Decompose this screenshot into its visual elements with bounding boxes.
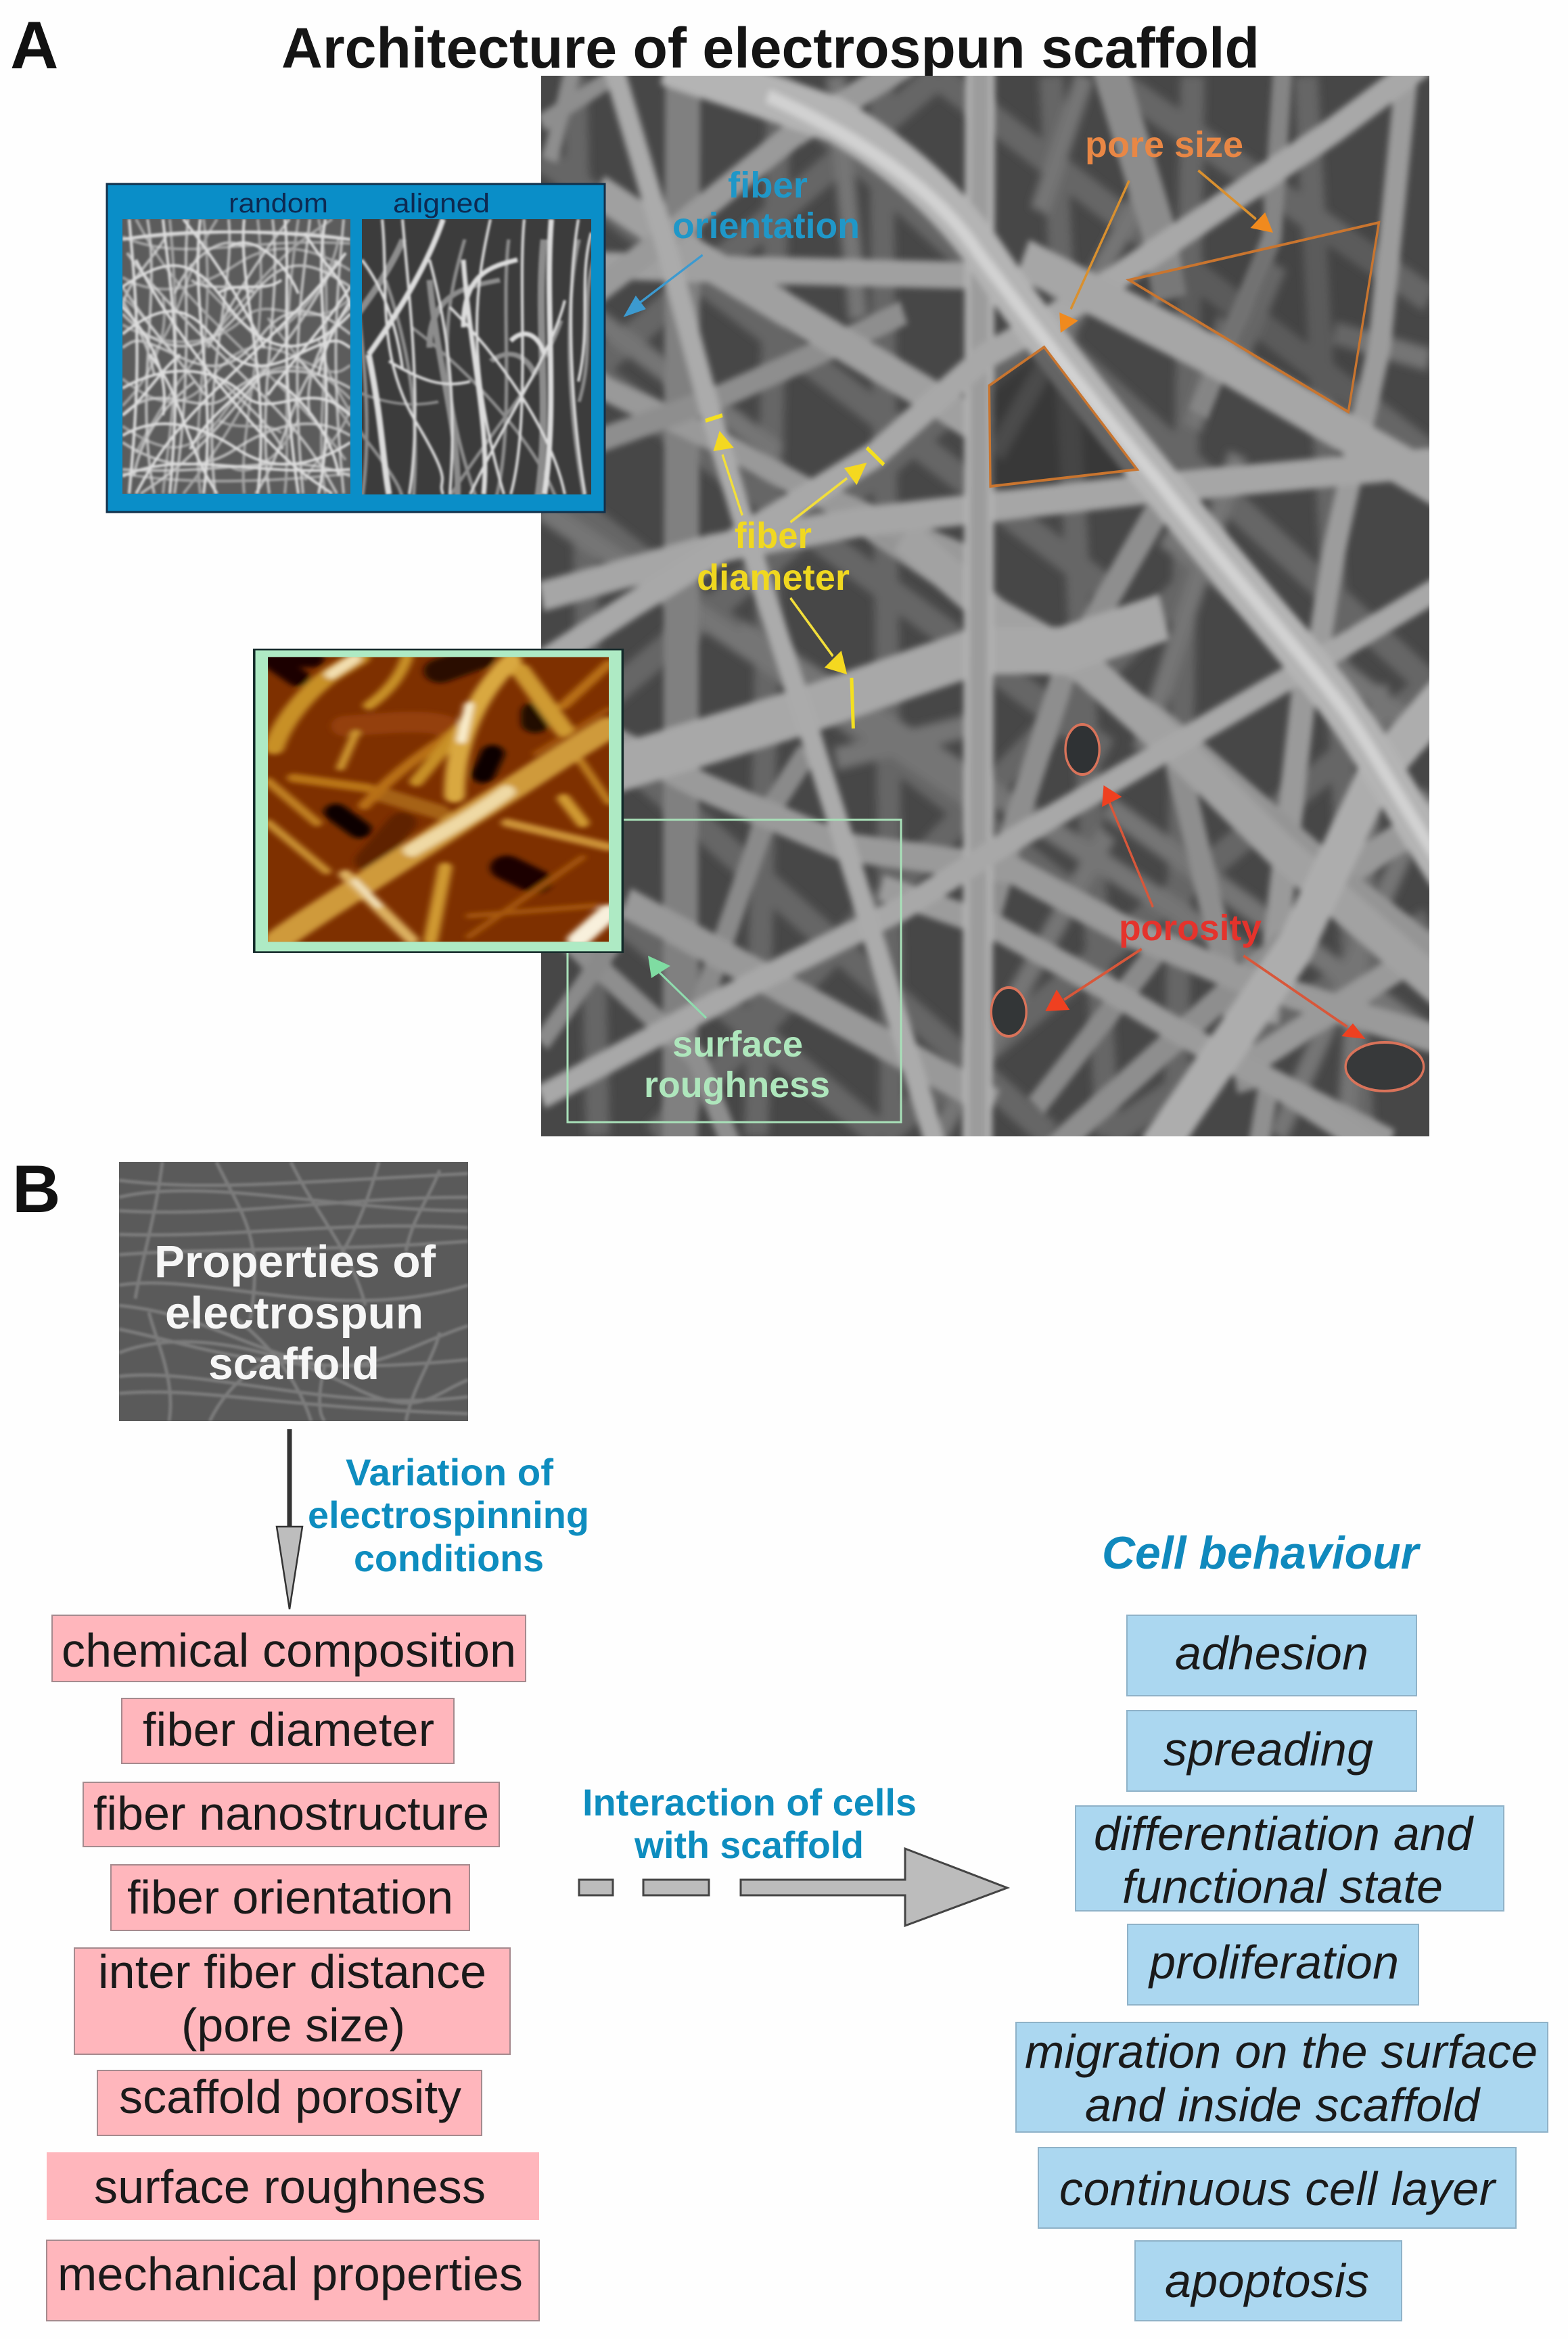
box: apoptosis	[1135, 2241, 1402, 2321]
inset panel: AFM image of surface roughness	[254, 649, 622, 952]
box: fiber orientation: fiber orientation	[127, 1871, 453, 1924]
label: variation of electrospinning conditions: electrospinning	[308, 1493, 589, 1536]
box: migration: and inside scaffold	[1085, 2079, 1481, 2131]
panel: properties of electrospun scaffold	[119, 1162, 468, 1421]
heading: cell behaviour: Cell behaviour	[1102, 1527, 1421, 1579]
annotation: pore size	[989, 124, 1379, 486]
label: variation of electrospinning conditions: Variation of	[346, 1451, 553, 1493]
box: inter fiber distance (pore size)	[74, 1945, 510, 2054]
box: scaffold porosity: scaffold porosity	[119, 2070, 461, 2123]
label: interaction of cells with scaffold	[582, 1781, 917, 1866]
box: mechanical properties	[47, 2240, 539, 2321]
annotation: fiber diameter: diameter	[697, 557, 850, 598]
label: variation of electrospinning conditions: conditions	[354, 1537, 544, 1579]
panel label A: A	[10, 7, 58, 83]
box: proliferation: proliferation	[1148, 1936, 1399, 1989]
annotation: porosity	[991, 724, 1424, 1091]
box: apoptosis: apoptosis	[1165, 2254, 1369, 2307]
scanning electron micrograph of fibers	[541, 62, 1448, 1151]
annotation: pore size: pore size	[1085, 124, 1243, 165]
annotation: fiber orientation: orientation	[672, 206, 860, 246]
box: continuous cell layer	[1038, 2148, 1516, 2228]
box: differentiation and functional state: differentiation and	[1094, 1807, 1474, 1860]
label: aligned: aligned	[393, 189, 490, 218]
annotation: surface roughness: roughness	[644, 1065, 830, 1105]
micrograph: aligned fibers	[362, 219, 591, 494]
box: fiber nanostructure: fiber nanostructure	[93, 1787, 489, 1840]
box: inter fiber distance (pore size): (pore size)	[181, 1999, 405, 2052]
box: fiber diameter: fiber diameter	[143, 1703, 434, 1756]
box: continuous cell layer: continuous cell layer	[1059, 2162, 1497, 2215]
panel label B: B	[12, 1151, 61, 1226]
text: properties: Properties of	[154, 1236, 436, 1287]
box: differentiation and functional state	[1076, 1806, 1504, 1913]
text: properties	[154, 1236, 436, 1389]
annotation: fiber orientation	[623, 165, 860, 317]
box: spreading: spreading	[1163, 1723, 1373, 1776]
box: inter fiber distance (pore size): inter fiber distance	[98, 1945, 486, 1998]
annotation: fiber orientation: fiber	[728, 165, 808, 206]
box: chemical composition: chemical composition	[62, 1624, 516, 1677]
micrograph: random fibers	[122, 219, 350, 494]
box: proliferation	[1128, 1924, 1419, 2005]
title: Architecture of electrospun scaffold	[281, 16, 1260, 80]
box: adhesion	[1127, 1615, 1416, 1696]
box: surface roughness	[47, 2152, 539, 2220]
box: mechanical properties: mechanical properties	[57, 2248, 523, 2300]
arrow: dashed interaction arrow	[579, 1849, 1007, 1926]
box: differentiation and functional state: functional state	[1122, 1860, 1443, 1913]
arrow: properties to parameters	[277, 1429, 302, 1609]
box: surface roughness: surface roughness	[94, 2160, 486, 2213]
box: migration	[1016, 2022, 1548, 2132]
annotation: surface roughness: surface	[672, 1024, 803, 1065]
text: properties: electrospun	[165, 1288, 423, 1339]
annotation: surface roughness	[568, 820, 901, 1122]
label: variation of electrospinning conditions	[308, 1451, 589, 1579]
box: spreading	[1127, 1711, 1416, 1791]
label: random: random	[229, 189, 328, 218]
annotation: fiber diameter	[697, 415, 884, 728]
annotation: porosity: porosity	[1119, 908, 1262, 948]
label: interaction of cells with scaffold: Interaction of cells	[582, 1781, 917, 1824]
label: interaction of cells with scaffold: with scaffold	[634, 1824, 864, 1866]
text: properties: scaffold	[208, 1339, 379, 1389]
inset panel: fiber orientation	[107, 184, 605, 515]
annotation: fiber diameter: fiber	[735, 515, 812, 556]
box: migration: migration on the surface	[1025, 2025, 1538, 2078]
box: adhesion: adhesion	[1175, 1627, 1368, 1680]
